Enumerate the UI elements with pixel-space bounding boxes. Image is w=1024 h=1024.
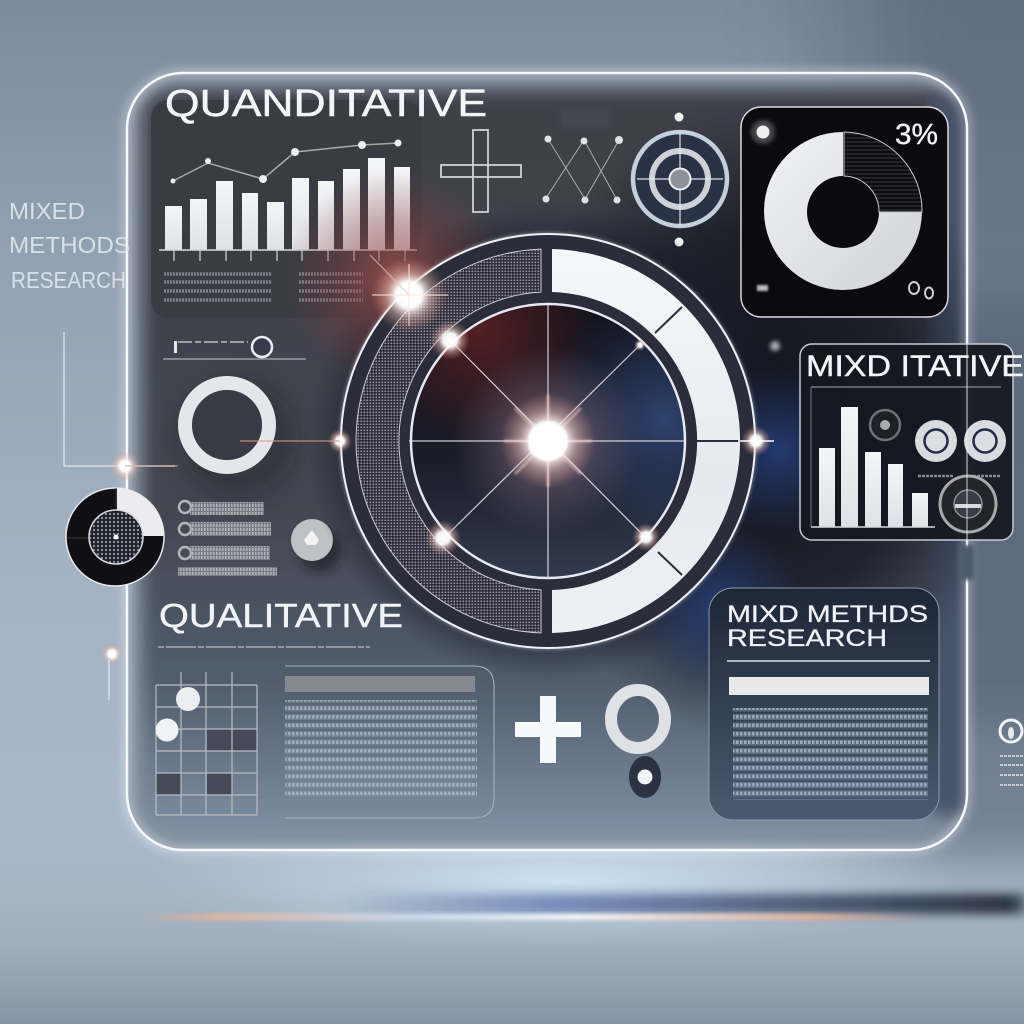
dark halo <box>308 201 788 681</box>
small dial <box>870 410 900 440</box>
donut: white segment <box>764 132 922 290</box>
icon: white sphere button <box>291 519 342 572</box>
label: 3%: 3% <box>895 119 938 151</box>
icon: concentric target <box>633 112 727 246</box>
left mesh segment <box>356 249 541 633</box>
lens flares <box>101 255 800 700</box>
icon: ring with dot <box>611 690 665 798</box>
panel: donut chart 3% <box>741 107 948 317</box>
icon: network diagram <box>542 108 623 204</box>
text rows list <box>178 501 277 576</box>
icon: white ring <box>185 383 282 482</box>
outer rim <box>340 233 756 649</box>
bar chart: quantitative <box>159 140 417 261</box>
panel: mixed methods research: RESEARCH <box>727 625 887 652</box>
icon: solid plus <box>515 696 581 763</box>
crosshair rays <box>409 304 686 578</box>
lens dial <box>940 476 996 532</box>
bars <box>819 407 928 527</box>
icon: outlined plus <box>441 130 521 212</box>
main glass panel <box>127 73 1010 850</box>
bracket connector <box>64 332 175 466</box>
heading: quantitative: QUANDITATIVE <box>165 83 487 125</box>
panel: mixed itative <box>800 344 1024 540</box>
right edge icon with caption <box>1000 720 1024 785</box>
icon: small donut with mesh core <box>66 488 164 586</box>
heading: mixd itative: MIXD ITATIVE <box>806 350 1024 383</box>
grid matrix <box>156 672 257 815</box>
qualitative tools header <box>163 337 306 359</box>
qualitative rule <box>158 646 370 648</box>
panel: quantitative backdrop <box>151 100 421 318</box>
floor light streak <box>140 894 1024 920</box>
side label: mixed methods research <box>9 198 130 293</box>
panel: qualitative text <box>285 666 494 818</box>
central dial <box>296 176 800 672</box>
inner dark lens <box>412 305 684 577</box>
panel: mixed methods research <box>709 588 939 820</box>
side label: mixed methods research: METHODS <box>9 232 130 258</box>
side label: mixed methods research: RESEARCH <box>11 267 126 293</box>
heading: mixd methods research: MIXD METHDS <box>727 601 928 628</box>
qualitative heading: QUALITATIVE <box>159 597 403 634</box>
panel frame crossing line <box>966 340 968 545</box>
right white segments <box>552 249 740 633</box>
caption lines under chart <box>164 274 363 300</box>
paired rings <box>915 420 957 462</box>
side label: mixed methods research: MIXED <box>9 198 85 224</box>
